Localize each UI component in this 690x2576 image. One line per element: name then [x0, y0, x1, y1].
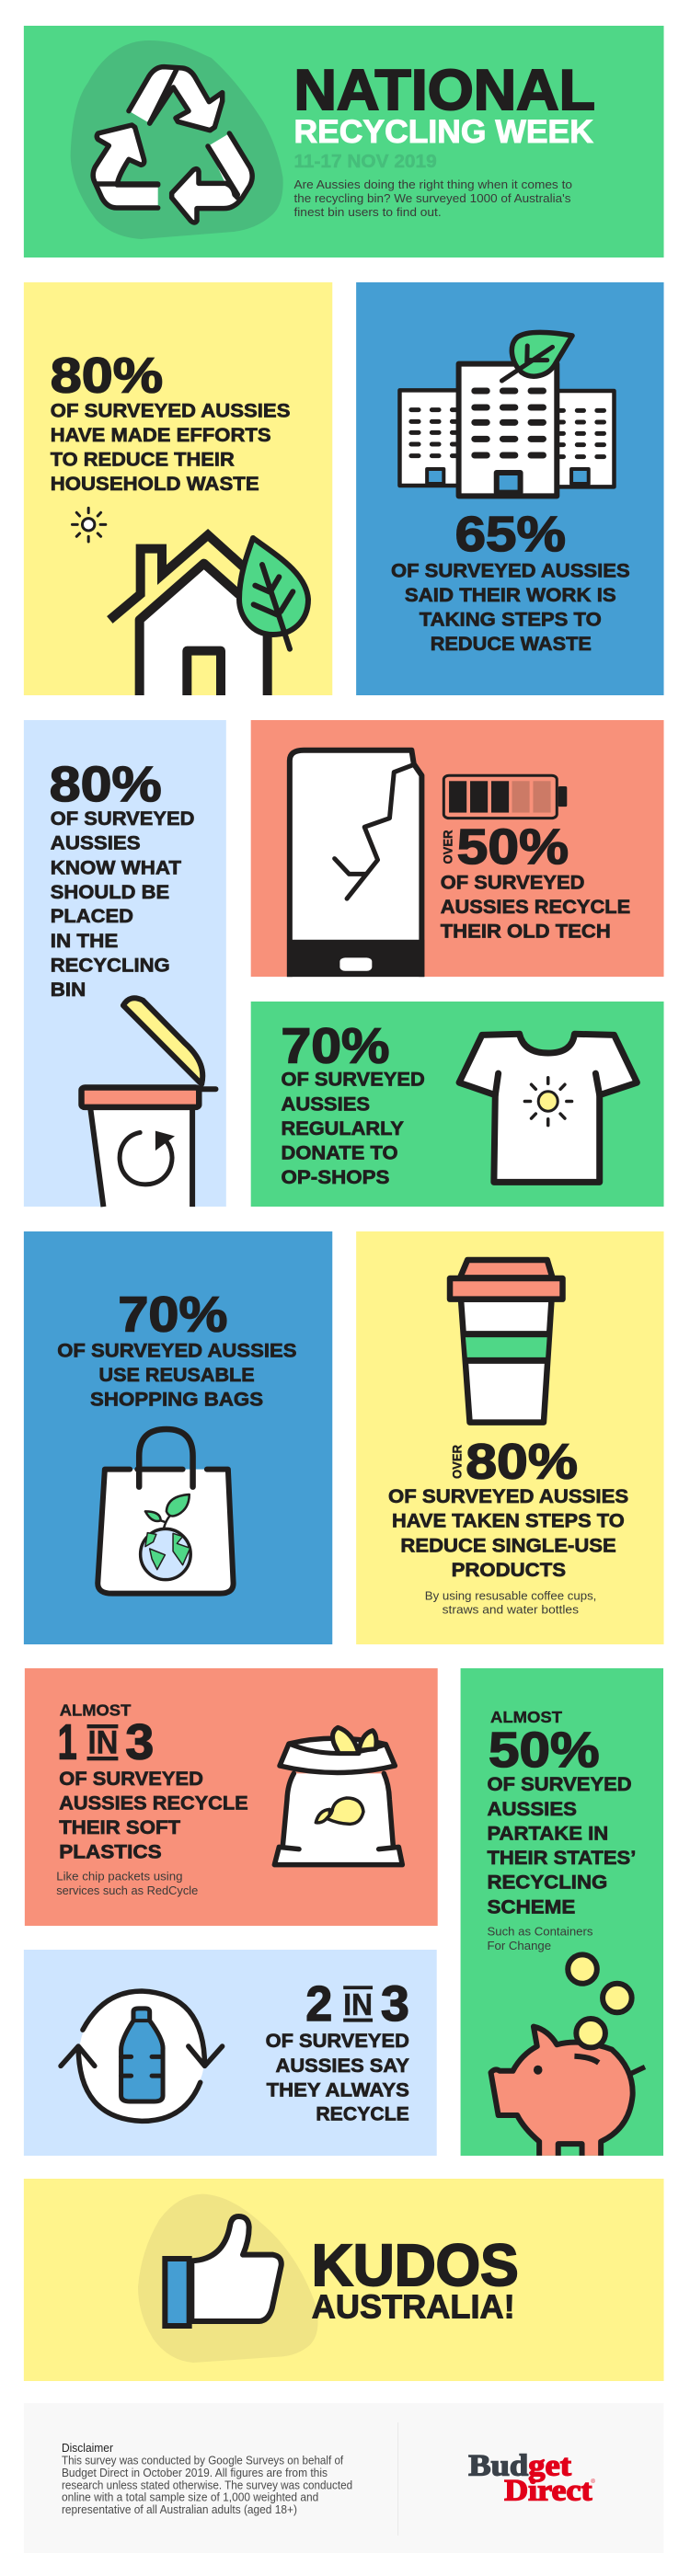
panel: 70% reusable shopping bags: [24, 1231, 332, 1644]
text: shopping bags: [57, 1341, 296, 1411]
text: recycling bin: AUSSIES: [51, 833, 141, 854]
note: containers for change: Such as Containers: [487, 1925, 593, 1939]
text: disclaimer: This survey was conducted by Google Surveys on behalf of: [62, 2455, 344, 2467]
text: recycling bin: PLACED: [51, 906, 133, 927]
stat: 80%: 80%: [51, 348, 163, 404]
text: op-shops: AUSSIES: [282, 1093, 370, 1116]
text: old tech: AUSSIES RECYCLE: [441, 897, 630, 918]
text: always recycle: RECYCLE: [316, 2104, 409, 2125]
text: recycling scheme: RECYCLING: [487, 1872, 607, 1894]
text: single-use: REDUCE SINGLE-USE: [400, 1535, 616, 1556]
label: over: OVER: [450, 1445, 465, 1479]
text: recycling bin: SHOULD BE: [51, 882, 169, 903]
text: household waste: HAVE MADE EFFORTS: [51, 425, 271, 446]
heading: kudos: KUDOS: [312, 2232, 519, 2298]
text: shopping bags: OF SURVEYED AUSSIES: [57, 1341, 296, 1362]
text: work steps: [391, 560, 630, 655]
text: work steps: SAID THEIR WORK IS: [405, 585, 616, 606]
stat: 1 in 3: 3: [125, 1714, 154, 1770]
note: containers for change: [487, 1925, 593, 1952]
icon: reusable coffee cup: [450, 1260, 563, 1423]
text: always recycle: OF SURVEYED: [266, 2031, 409, 2052]
icon: piggy bank with coins: [491, 1954, 645, 2156]
stat: 2 in 3: 3: [381, 1976, 409, 2032]
icon: thumbs up: [165, 2216, 282, 2326]
text: soft plastics: OF SURVEYED: [59, 1769, 203, 1790]
text: shopping bags: SHOPPING BAGS: [90, 1390, 263, 1411]
panel: 80% know what goes in the bin: [24, 720, 226, 1207]
text: old tech: [441, 872, 630, 942]
text: recycling bin: [51, 808, 194, 1001]
panel: almost 50% recycling scheme: [461, 1668, 663, 2156]
text: recycling bin: KNOW WHAT: [51, 857, 181, 878]
icon: recycling bin: [82, 998, 215, 1207]
text: disclaimer: [62, 2442, 352, 2516]
text: disclaimer: representative of all Australian adults (aged 18+): [62, 2503, 297, 2516]
icon: shopping bag with globe: [98, 1429, 234, 1594]
text: op-shops: DONATE TO: [282, 1143, 398, 1164]
text: single-use: PRODUCTS: [452, 1560, 566, 1581]
icon: office buildings with leaf: [399, 332, 614, 496]
icon: recycling arrows: [93, 67, 252, 223]
panel: kudos: [24, 2179, 664, 2381]
stat: 1 in 3: IN: [88, 1724, 118, 1760]
text: recycling scheme: THEIR STATES’: [487, 1848, 636, 1869]
note: chip packets: [56, 1870, 198, 1897]
logo: Budget Direct: [468, 2450, 595, 2507]
text: work steps: REDUCE WASTE: [431, 634, 592, 655]
text: recycling bin: OF SURVEYED: [51, 808, 194, 830]
panel: over 50% recycle old tech: [251, 720, 664, 977]
text: disclaimer: research unless stated otherwise. The survey was conducted: [62, 2479, 352, 2491]
text: soft plastics: PLASTICS: [59, 1842, 162, 1863]
logo: Budget Direct: ®: [591, 2479, 595, 2485]
note: containers for change: For Change: [487, 1939, 551, 1952]
panel: 80% reduce household waste: [24, 282, 332, 695]
intro text: Are Aussies doing the right thing when it comes to: [293, 177, 572, 191]
text: always recycle: AUSSIES SAY: [276, 2055, 409, 2077]
text: recycling bin: IN THE: [51, 931, 118, 952]
icon: battery: [443, 775, 567, 819]
stat: 2 in 3: [305, 1976, 409, 2032]
panel: disclaimer footer: [24, 2403, 664, 2553]
icon: cracked phone: [287, 750, 424, 977]
logo: Budget Direct: Direct: [504, 2474, 592, 2507]
stat: 2 in 3: IN: [343, 1987, 373, 2021]
stat: 50%: 50%: [489, 1723, 600, 1778]
panel: 70% donate to op-shops: [251, 1002, 664, 1207]
heading: australia: AUSTRALIA!: [312, 2288, 515, 2326]
text: recycling bin: BIN: [51, 979, 86, 1001]
text: op-shops: OF SURVEYED: [282, 1070, 425, 1091]
note: chip packets: services such as RedCycle: [56, 1883, 198, 1897]
text: disclaimer: Budget Direct in October 2019. All figures are from this: [62, 2467, 328, 2479]
text: recycling scheme: [487, 1774, 636, 1918]
text: op-shops: REGULARLY: [282, 1118, 404, 1139]
text: old tech: OF SURVEYED: [441, 872, 584, 893]
icon: house with leaf: [109, 535, 308, 695]
stat: 70%: 70%: [282, 1019, 389, 1074]
text: recycling scheme: PARTAKE IN: [487, 1824, 608, 1845]
text: work steps: TAKING STEPS TO: [420, 610, 602, 631]
text: op-shops: OP-SHOPS: [282, 1167, 389, 1188]
intro text: [293, 177, 572, 219]
panel: 65% work reducing waste: [356, 282, 664, 695]
text: household waste: TO REDUCE THEIR: [51, 450, 235, 471]
text: household waste: OF SURVEYED AUSSIES: [51, 400, 291, 421]
icon: bottle in cycle arrows: [61, 1991, 223, 2121]
text: disclaimer: Disclaimer: [62, 2442, 113, 2455]
text: household waste: [51, 400, 291, 495]
text: op-shops: [282, 1070, 425, 1188]
stat: 2 in 3: 2: [305, 1976, 332, 2032]
stat: 80%: 80%: [50, 757, 162, 812]
stat: 70%: 70%: [118, 1287, 227, 1342]
icon: background blob: [138, 2194, 318, 2363]
note: coffee cups: straws and water bottles: [443, 1602, 580, 1616]
icon: sun: [72, 508, 106, 542]
text: work steps: OF SURVEYED AUSSIES: [391, 560, 630, 581]
text: disclaimer: online with a total sample size of 1,000 weighted and: [62, 2491, 318, 2504]
panel: almost 1 in 3 soft plastics: [25, 1668, 438, 1926]
intro text: finest bin users to find out.: [293, 205, 442, 219]
logo: Budget Direct: Budget: [468, 2450, 571, 2483]
stat: 1 in 3: [58, 1714, 154, 1770]
note: coffee cups: By using resusable coffee cups,: [425, 1588, 596, 1602]
label: over: OVER: [441, 830, 455, 864]
text: single-use: OF SURVEYED AUSSIES: [388, 1486, 628, 1507]
icon: chip packet: [273, 1727, 402, 1866]
stat: 65%: 65%: [455, 507, 566, 562]
note: coffee cups: [425, 1588, 596, 1616]
text: single-use: [388, 1486, 628, 1581]
text: household waste: HOUSEHOLD WASTE: [51, 474, 259, 495]
panel: header: [24, 26, 664, 258]
icon: t-shirt with sun: [459, 1034, 637, 1182]
label: almost: ALMOST: [490, 1708, 562, 1726]
label: almost: ALMOST: [60, 1700, 131, 1719]
text: always recycle: THEY ALWAYS: [267, 2079, 409, 2101]
text: recycling scheme: SCHEME: [487, 1896, 575, 1918]
stat: 80%: 80%: [466, 1435, 578, 1490]
panel: 2 in 3 always recycle: [24, 1950, 437, 2156]
text: old tech: THEIR OLD TECH: [441, 921, 611, 942]
intro text: the recycling bin? We surveyed 1000 of Australia's: [293, 191, 571, 205]
subtitle: RECYCLING WEEK: [293, 114, 593, 150]
note: chip packets: Like chip packets using: [56, 1870, 183, 1883]
text: recycling scheme: AUSSIES: [487, 1799, 577, 1820]
text: soft plastics: [59, 1769, 248, 1863]
panel: over 80% reduce single-use: [356, 1231, 664, 1644]
text: always recycle: [266, 2031, 409, 2125]
text: single-use: HAVE TAKEN STEPS TO: [392, 1511, 625, 1532]
text: soft plastics: AUSSIES RECYCLE: [59, 1792, 248, 1815]
date: 11-17 NOV 2019: [293, 152, 437, 172]
text: recycling bin: RECYCLING: [51, 955, 170, 976]
text: recycling scheme: OF SURVEYED: [487, 1774, 632, 1795]
text: shopping bags: USE REUSABLE: [98, 1365, 255, 1386]
title: NATIONAL: [293, 59, 595, 122]
stat: 50%: 50%: [457, 819, 569, 875]
text: soft plastics: THEIR SOFT: [59, 1817, 180, 1838]
icon: background blob: [71, 40, 283, 239]
stat: 1 in 3: 1: [58, 1714, 77, 1770]
